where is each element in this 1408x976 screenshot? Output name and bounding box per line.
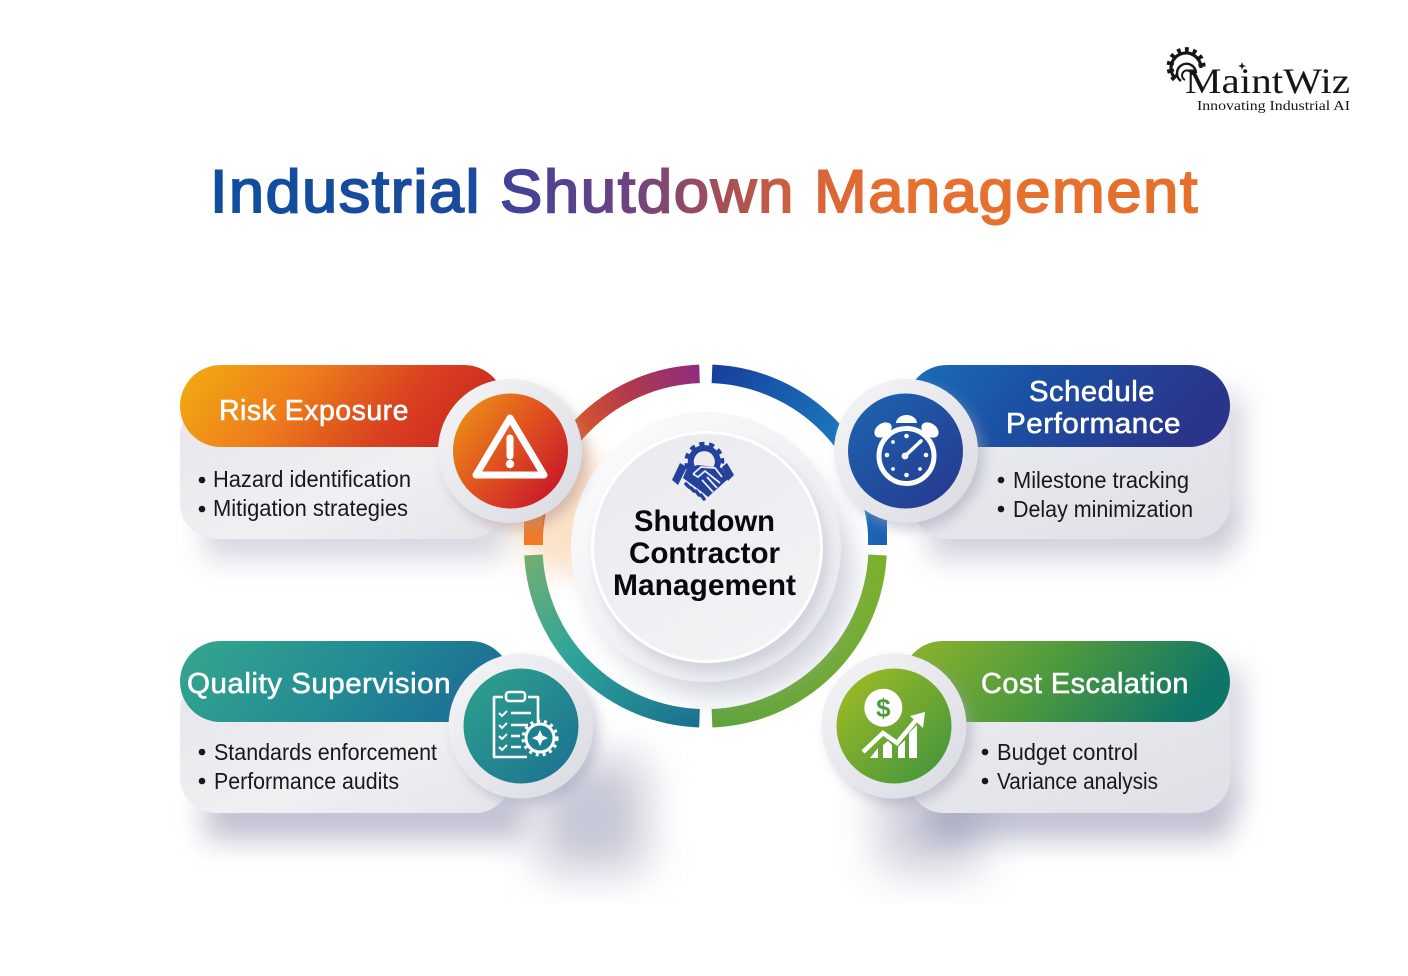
center label: Contractor: [629, 537, 780, 570]
icon: warning triangle: [438, 379, 588, 530]
bullet list: Budget control: [997, 739, 1138, 765]
bullet list: Hazard identification: [213, 466, 411, 492]
bullet list: Mitigation strategies: [213, 495, 408, 521]
title: Management: [814, 158, 1199, 225]
icon: logo gear: [1170, 51, 1202, 81]
panel: center hub: [571, 412, 852, 697]
bullet list: Performance audits: [214, 768, 399, 794]
bullet list: [199, 466, 411, 521]
center label: Shutdown: [634, 505, 775, 538]
icon: logo sparkle: [1238, 62, 1246, 70]
bullet list: Delay minimization: [1013, 496, 1193, 522]
bullet list: Variance analysis: [997, 768, 1158, 794]
title: Shutdown: [500, 158, 795, 225]
panel: quality supervision: [180, 641, 599, 813]
heading: Schedule: [1029, 376, 1155, 408]
panel: cost escalation: [822, 641, 1230, 813]
logo: MaintWiz: [1170, 51, 1351, 113]
bullet list: Standards enforcement: [214, 739, 438, 765]
bullet list: [998, 467, 1193, 522]
bullet list: [982, 739, 1158, 794]
logo wordmark: MaintWiz: [1185, 61, 1350, 101]
bullet list: [199, 739, 438, 794]
bullet list: Milestone tracking: [1013, 467, 1189, 493]
icon: clipboard with gear: [448, 654, 599, 805]
icon: gear and handshake: [672, 445, 734, 499]
heading: Performance: [1006, 408, 1181, 440]
icon: stopwatch clock: [834, 379, 984, 530]
icon: dollar coin and rising chart: $: [876, 693, 891, 723]
center label: [613, 505, 796, 602]
title: Industrial: [210, 158, 481, 225]
heading: Quality Supervision: [187, 668, 451, 700]
heading: Risk Exposure: [219, 395, 409, 427]
title: [210, 158, 1199, 225]
panel: risk exposure: [180, 365, 588, 539]
center label: Management: [613, 569, 796, 602]
logo tagline: Innovating Industrial AI: [1197, 98, 1351, 113]
heading: [1006, 376, 1181, 440]
ring: segmented gradient ring: [524, 374, 887, 718]
icon: dollar coin and rising chart: [822, 654, 972, 805]
heading: Cost Escalation: [981, 668, 1189, 700]
panel: schedule performance: [834, 365, 1230, 539]
